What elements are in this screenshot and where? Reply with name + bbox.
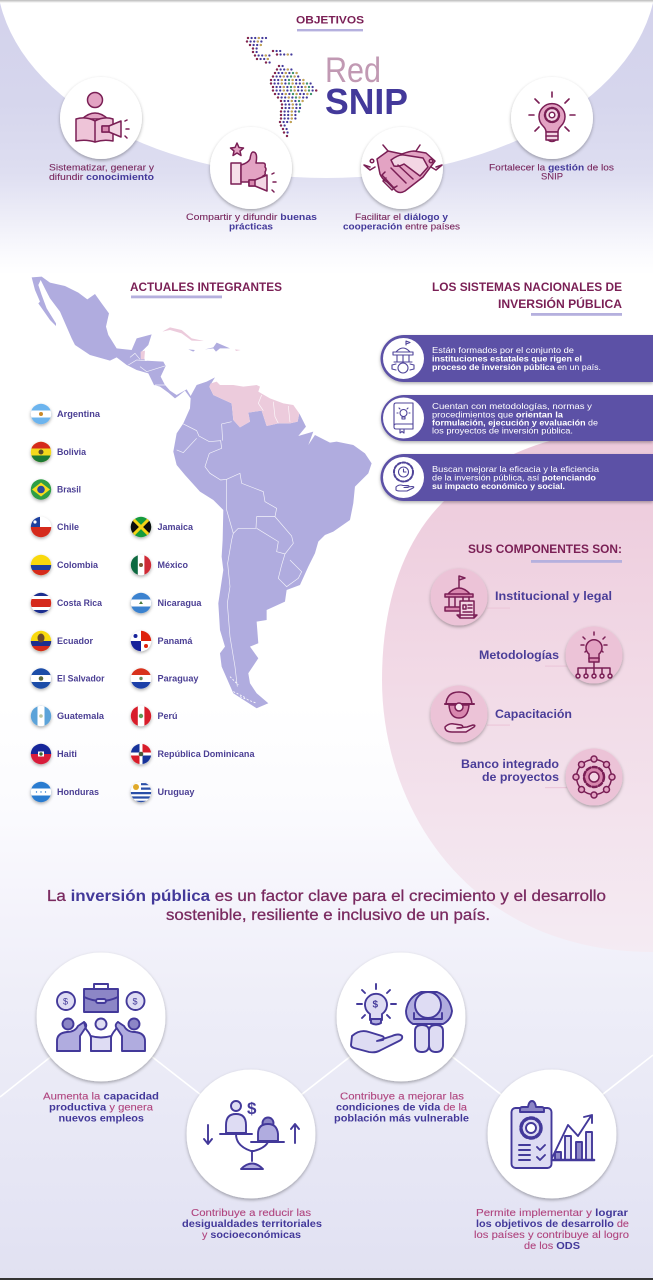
benefit 3: Contribuye a mejorar las (340, 1092, 464, 1102)
flag: Honduras (30, 781, 52, 803)
heading: los sistemas nacionales (432, 282, 622, 316)
flag list: Brasil (57, 484, 81, 494)
component: metodologias (479, 626, 622, 684)
flag: Uruguay (130, 781, 152, 803)
icon: team with briefcase (57, 984, 145, 1051)
icon: book with lightbulb (394, 403, 413, 433)
icon: institution with document (445, 576, 477, 618)
objetivo 3 (343, 127, 460, 232)
flag: Nicaragua (130, 592, 152, 614)
panel: metodologias: Cuentan con metodologías, normas y (432, 401, 593, 411)
component: banco integrado: Banco integrado (461, 757, 559, 771)
icon: lightbulb with gear (529, 92, 575, 142)
benefit 1: Aumenta la capacidad (43, 1092, 159, 1102)
headline statement: La inversión pública es un factor clave para el crecimiento y el desarrollo (47, 888, 606, 905)
icon: gear with hand (394, 462, 414, 491)
benefit 1: $ (63, 996, 68, 1006)
objetivo 1: difundir conocimiento (49, 172, 154, 183)
heading: los sistemas nacionales: LOS SISTEMAS NACIONALES DE (432, 282, 622, 294)
panel: eficacia: de la inversión pública, así potenciando (432, 472, 596, 482)
icon: balance with people (204, 1101, 299, 1169)
benefit 3 (334, 952, 469, 1124)
flag: Ecuador (30, 630, 52, 652)
flag list: Haiti (57, 749, 77, 759)
flag: Panama (130, 630, 152, 652)
panel: metodologias: los proyectos de inversión pública. (432, 426, 573, 436)
flag list: Panamá (158, 636, 193, 646)
icon: thumbs up (230, 143, 276, 192)
component: capacitacion (430, 686, 572, 742)
benefit 1: nuevos empleos (58, 1114, 144, 1124)
benefit 3: población más vulnerable (334, 1114, 469, 1124)
logo: Red SNIP: Red (325, 51, 381, 90)
panel: eficacia: Buscan mejorar la eficacia y la eficiencia (432, 464, 599, 474)
objetivo 2: prácticas (229, 222, 273, 232)
benefit 2: $ (247, 1099, 257, 1118)
flag: Guatemala (30, 705, 52, 727)
benefit 4: Permite implementar y lograr (476, 1208, 628, 1219)
component: metodologias: Metodologías (479, 648, 559, 662)
benefit 2: y socioeconómicas (202, 1230, 301, 1241)
panel: eficacia: su impacto económico y social. (432, 481, 565, 491)
objetivo 2: Compartir y difundir buenas (186, 212, 317, 223)
objetivo 4: Fortalecer la gestión de los (489, 162, 614, 174)
heading: los sistemas nacionales: INVERSIÓN PÚBLICA (498, 298, 622, 311)
flag list: Guatemala (57, 711, 105, 721)
flag list: Honduras (57, 787, 99, 797)
flag list: México (158, 560, 188, 570)
panel: metodologias (381, 395, 653, 441)
flag list (30, 403, 255, 803)
headline statement (47, 888, 606, 924)
flag list: El Salvador (57, 674, 105, 684)
headline statement: sostenible, resiliente e inclusivo de un país. (166, 907, 490, 924)
benefit 3: condiciones de vida de la (336, 1102, 467, 1114)
icon: gear network (573, 756, 615, 798)
flag list: Argentina (57, 409, 101, 419)
flag list: Bolivia (57, 447, 87, 457)
flag: Chile (30, 516, 52, 538)
flag list: Nicaragua (158, 598, 202, 608)
component: banco integrado (461, 748, 622, 806)
objetivo 4: SNIP (541, 172, 563, 182)
flag: Brasil (30, 478, 52, 500)
objetivo 3: Facilitar el diálogo y (355, 212, 449, 223)
objetivo 4 (489, 77, 614, 182)
objetivo 3: cooperación entre países (343, 222, 460, 232)
flag list: Perú (158, 711, 178, 721)
benefit 1: $ (132, 996, 138, 1006)
objetivo 1 (49, 77, 154, 183)
benefit 4: los objetivos de desarrollo de (476, 1219, 629, 1230)
flag list: Uruguay (158, 787, 194, 797)
flag list: Chile (57, 522, 79, 532)
panel: instituciones: Están formados por el conjunto de (432, 345, 574, 355)
panel: metodologias: procedimientos que orientan la (432, 410, 563, 420)
panel: metodologias: formulación, ejecución y evaluación de (432, 418, 598, 428)
heading: objetivos (296, 14, 364, 31)
heading: actuales integrantes: ACTUALES INTEGRANTES (130, 282, 282, 294)
benefit 4 (474, 1070, 629, 1252)
panel: instituciones (381, 335, 653, 382)
flag: Colombia (30, 554, 52, 576)
flag: Paraguay (130, 668, 152, 690)
icon: helmet gear and hand (445, 692, 475, 732)
flag: El Salvador (30, 668, 52, 690)
flag list: Colombia (57, 560, 99, 570)
objetivo 1: Sistematizar, generar y (49, 162, 154, 174)
icon: clipboard with chart (512, 1101, 594, 1168)
icon: hand with bulb and seated person (351, 984, 452, 1052)
benefit 2: desigualdades territoriales (182, 1219, 322, 1230)
benefit 2: Contribuye a reducir las (191, 1208, 311, 1219)
logo: Red SNIP: SNIP (325, 81, 408, 122)
icon: institution with coin (392, 341, 414, 373)
white top ellipse (0, 0, 653, 178)
component: institucional y legal (430, 568, 612, 626)
benefit 1 (36, 952, 166, 1124)
flag list: Jamaica (158, 522, 194, 532)
panel: instituciones: proceso de inversión pública en un país. (432, 362, 601, 372)
flag: Jamaica (130, 516, 152, 538)
objetivo 2 (186, 127, 317, 232)
flag list: Paraguay (158, 674, 198, 684)
icon: reader with megaphone (76, 92, 129, 142)
flag: Haiti (30, 743, 52, 765)
flag list: Costa Rica (57, 598, 103, 608)
benefit 4: de los ODS (524, 1241, 580, 1252)
logo dot map (247, 38, 317, 136)
flag: Costa Rica (30, 592, 52, 614)
logo: Red SNIP (247, 38, 408, 136)
flag: Argentina (30, 403, 52, 425)
panel: eficacia (380, 454, 653, 501)
benefit 3: $ (372, 1000, 378, 1010)
icon: handshake (364, 145, 442, 192)
flag list: Ecuador (57, 636, 93, 646)
flag list: República Dominicana (158, 749, 255, 759)
component: banco integrado: de proyectos (482, 770, 559, 784)
flag: Bolivia (30, 441, 52, 464)
pink background shape (382, 430, 653, 952)
heading: sus componentes: SUS COMPONENTES SON: (468, 544, 622, 556)
flag: Dominican Republic (130, 743, 152, 765)
benefit 2 (182, 1070, 322, 1241)
benefit 4: los países y contribuye al logro (474, 1230, 629, 1241)
heading: objetivos: OBJETIVOS (296, 14, 364, 26)
icon: bulb with network (576, 632, 612, 678)
component: institucional y legal: Institucional y legal (495, 589, 612, 603)
map: Latin America (32, 277, 372, 708)
benefit 1: productiva y genera (49, 1102, 153, 1114)
flag: Peru (130, 705, 152, 727)
flag: Mexico (130, 554, 152, 576)
component: capacitacion: Capacitación (495, 707, 572, 721)
panel: instituciones: instituciones estatales que rigen el (432, 354, 582, 364)
